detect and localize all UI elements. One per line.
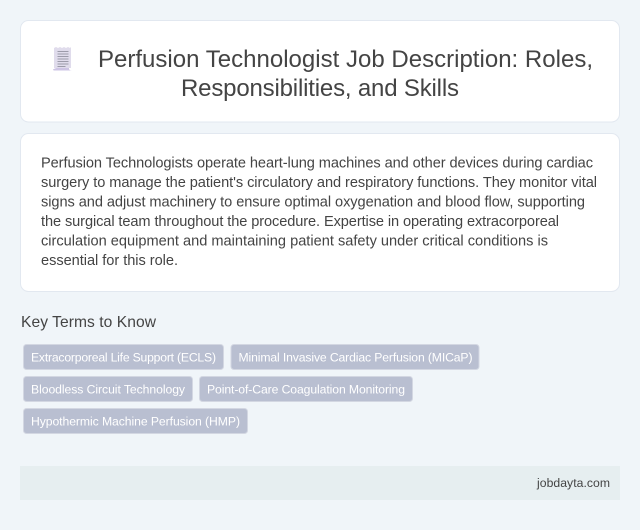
tag: bloodless circuit <box>24 376 192 402</box>
text block: description: essential for this role. <box>41 253 178 269</box>
tag: coagulation monitoring <box>200 376 412 402</box>
text block: description: surgery to manage the patient's circulatory and respiratory functions. They monitor vital <box>41 175 597 191</box>
footer bar: jobdayta.com <box>536 476 610 490</box>
text block: description <box>41 156 597 269</box>
tag: bloodless circuit: Bloodless Circuit Technology <box>31 382 186 396</box>
tag: MICaP <box>231 344 479 370</box>
title: Perfusion Technologist Job Description: Roles, <box>98 46 593 73</box>
tag: MICaP: Minimal Invasive Cardiac Perfusion (MICaP) <box>238 350 472 364</box>
tag: coagulation monitoring: Point-of-Care Coagulation Monitoring <box>207 382 405 396</box>
panel: description card <box>20 134 620 292</box>
heading: key terms: Key Terms to Know <box>21 314 157 331</box>
tag: ECLS: Extracorporeal Life Support (ECLS) <box>31 350 216 364</box>
tag: HMP <box>24 408 248 434</box>
text block: description: circulation equipment and maintaining patient safety under critical conditions is <box>41 234 548 250</box>
panel: header card <box>20 20 620 122</box>
tag: ECLS <box>24 344 224 370</box>
footer bar <box>20 466 620 500</box>
text block: description: Perfusion Technologists operate heart-lung machines and other devices during cardiac <box>41 156 593 172</box>
title <box>98 46 593 102</box>
icon: document scroll <box>53 47 72 70</box>
text block: description: the surgical team throughout the procedure. Expertise in operating extracorporeal <box>41 214 559 230</box>
title: Responsibilities, and Skills <box>181 75 459 102</box>
tag: HMP: Hypothermic Machine Perfusion (HMP) <box>31 414 240 428</box>
text block: description: signs and adjust machinery to ensure optimal oxygenation and blood flow, supporting <box>41 194 585 210</box>
